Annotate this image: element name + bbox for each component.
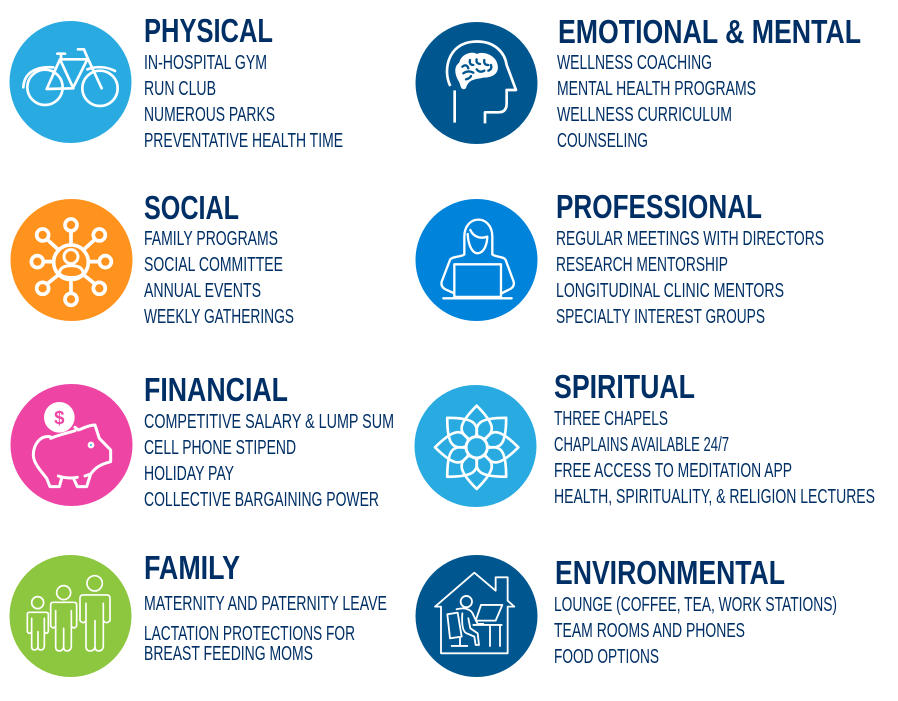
list: spiritual items xyxy=(554,408,875,508)
icon: piggy bank xyxy=(10,384,132,506)
list: spiritual items: THREE CHAPELS xyxy=(554,408,668,430)
heading: financial: FINANCIAL xyxy=(144,371,288,408)
list: professional items: SPECIALTY INTEREST GROUPS xyxy=(556,306,765,328)
icon: bicycle xyxy=(10,21,132,143)
list: social items: FAMILY PROGRAMS xyxy=(144,228,278,250)
list: physical items: PREVENTATIVE HEALTH TIME xyxy=(144,130,343,152)
list: financial items: COLLECTIVE BARGAINING POWER xyxy=(144,489,379,511)
list: family items xyxy=(144,593,387,665)
panel: professional xyxy=(416,188,824,328)
list: emotional items xyxy=(557,52,756,152)
list: financial items xyxy=(144,411,394,511)
heading: family: FAMILY xyxy=(144,549,240,586)
panel: emotional and mental xyxy=(416,13,861,152)
list: social items: WEEKLY GATHERINGS xyxy=(144,306,294,328)
list: physical items: RUN CLUB xyxy=(144,78,216,100)
panel: financial xyxy=(10,371,394,511)
list: physical items: IN-HOSPITAL GYM xyxy=(144,52,267,74)
list: financial items: CELL PHONE STIPEND xyxy=(144,437,296,459)
heading: professional: PROFESSIONAL xyxy=(556,188,762,225)
icon: family of three xyxy=(10,555,132,677)
list: professional items: RESEARCH MENTORSHIP xyxy=(556,254,728,276)
list: social items: SOCIAL COMMITTEE xyxy=(144,254,283,276)
panel: environmental xyxy=(416,554,837,677)
list: physical items xyxy=(144,52,343,152)
icon: piggy bank: $ xyxy=(54,407,65,428)
list: professional items: LONGITUDINAL CLINIC MENTORS xyxy=(556,280,784,302)
icon: woman at laptop xyxy=(416,199,538,321)
panel: social xyxy=(10,189,294,328)
list: physical items: NUMEROUS PARKS xyxy=(144,104,275,126)
list: family items: LACTATION PROTECTIONS FOR xyxy=(144,623,355,645)
list: environmental items: TEAM ROOMS AND PHONES xyxy=(554,620,745,642)
list: environmental items: FOOD OPTIONS xyxy=(554,646,659,668)
list: social items xyxy=(144,228,294,328)
list: emotional items: WELLNESS COACHING xyxy=(557,52,712,74)
heading: physical: PHYSICAL xyxy=(144,12,273,49)
list: family items: BREAST FEEDING MOMS xyxy=(144,643,313,665)
list: emotional items: WELLNESS CURRICULUM xyxy=(557,104,732,126)
icon: head with brain xyxy=(416,22,538,144)
list: environmental items xyxy=(554,594,837,668)
heading: environmental: ENVIRONMENTAL xyxy=(555,554,785,591)
panel: family xyxy=(10,549,387,677)
list: emotional items: COUNSELING xyxy=(557,130,648,152)
list: family items: MATERNITY AND PATERNITY LEAVE xyxy=(144,593,387,615)
list: financial items: HOLIDAY PAY xyxy=(144,463,234,485)
list: spiritual items: FREE ACCESS TO MEDITATION APP xyxy=(554,460,792,482)
panel: physical xyxy=(10,12,343,152)
heading: social: SOCIAL xyxy=(144,189,239,226)
panel: spiritual xyxy=(414,368,875,508)
icon: social network xyxy=(10,199,132,321)
icon: mandala flower xyxy=(414,385,536,507)
list: financial items: COMPETITIVE SALARY & LUMP SUM xyxy=(144,411,394,433)
icon: person working at home xyxy=(416,555,538,677)
list: emotional items: MENTAL HEALTH PROGRAMS xyxy=(557,78,756,100)
list: professional items xyxy=(556,228,824,328)
list: spiritual items: CHAPLAINS AVAILABLE 24/7 xyxy=(554,434,729,456)
list: social items: ANNUAL EVENTS xyxy=(144,280,261,302)
heading: spiritual: SPIRITUAL xyxy=(554,368,695,405)
